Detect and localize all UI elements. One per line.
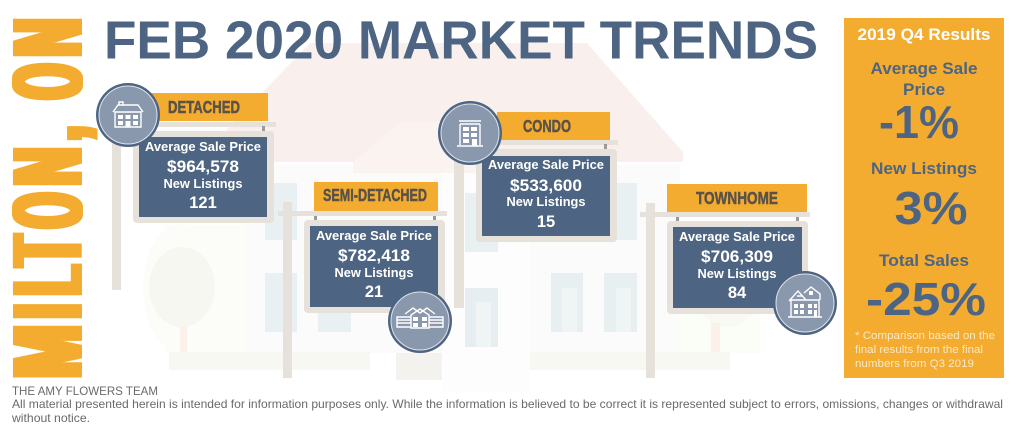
footnote: comparison xyxy=(855,330,995,370)
disclaimer text xyxy=(11,384,1003,425)
stats: townhome: 84 xyxy=(728,284,747,302)
stat: average sale price: Price xyxy=(903,80,945,99)
stats: condo xyxy=(488,157,604,231)
stat: average sale price: -1% xyxy=(879,96,959,148)
sign: detached xyxy=(96,83,276,290)
footnote: comparison: final results from the final xyxy=(855,344,983,356)
stats: detached: New Listings xyxy=(164,176,242,191)
disclaimer text: THE AMY FLOWERS TEAM xyxy=(12,384,158,398)
stats: detached: 121 xyxy=(189,194,217,212)
stat: average sale price xyxy=(870,59,978,148)
label: townhome: TOWNHOME xyxy=(696,188,778,208)
stats: semi-detached: $782,418 xyxy=(338,246,410,265)
icon: condo building xyxy=(438,101,502,165)
stats: condo: Average Sale Price xyxy=(488,157,604,172)
stat: total sales xyxy=(866,251,986,325)
disclaimer text: All material presented herein is intended for information purposes only. While the information is believed to be correct it is represented subject to errors, omissions, changes or withdrawal xyxy=(12,397,1003,411)
footnote: comparison: * Comparison based on the xyxy=(855,330,995,342)
stats: condo: New Listings xyxy=(506,194,586,209)
stats: condo: 15 xyxy=(537,213,555,231)
sign: semi-detached xyxy=(278,182,452,378)
disclaimer text: without notice. xyxy=(11,411,90,425)
stat: new listings: New Listings xyxy=(871,159,977,178)
sign: townhome xyxy=(640,184,837,378)
label: condo: CONDO xyxy=(523,116,571,136)
stats: townhome: New Listings xyxy=(698,266,776,281)
icon: semi-detached house xyxy=(388,289,452,353)
icon: townhome house xyxy=(773,271,837,335)
stat: average sale price: Average Sale xyxy=(870,59,978,78)
stats: semi-detached: 21 xyxy=(365,283,383,301)
main title: FEB 2020 MARKET TRENDS xyxy=(104,10,818,70)
stats: semi-detached xyxy=(316,228,432,301)
stats: semi-detached: Average Sale Price xyxy=(316,228,432,243)
stat: new listings xyxy=(871,159,977,234)
stats: detached xyxy=(145,139,261,212)
stat: total sales: -25% xyxy=(866,273,986,325)
stats: detached: $964,578 xyxy=(167,157,239,176)
stat: new listings: 3% xyxy=(894,182,968,234)
sign: condo xyxy=(438,101,618,308)
panel heading: 2019 Q4 Results xyxy=(858,25,990,44)
stats: townhome: Average Sale Price xyxy=(679,229,795,244)
stat: total sales: Total Sales xyxy=(879,251,969,270)
vertical location title xyxy=(0,19,104,378)
footnote: comparison: numbers from Q3 2019 xyxy=(855,358,974,370)
stats: condo: $533,600 xyxy=(510,176,582,195)
panel: 2019 Q4 results xyxy=(844,18,1004,378)
stats: detached: Average Sale Price xyxy=(145,139,261,154)
stats: townhome xyxy=(679,229,795,302)
background house illustration xyxy=(143,43,761,393)
label: detached: DETACHED xyxy=(168,97,240,117)
label: semi-detached: SEMI-DETACHED xyxy=(323,185,427,205)
icon: detached house xyxy=(96,83,160,147)
stats: townhome: $706,309 xyxy=(701,247,773,266)
stats: semi-detached: New Listings xyxy=(334,265,414,280)
